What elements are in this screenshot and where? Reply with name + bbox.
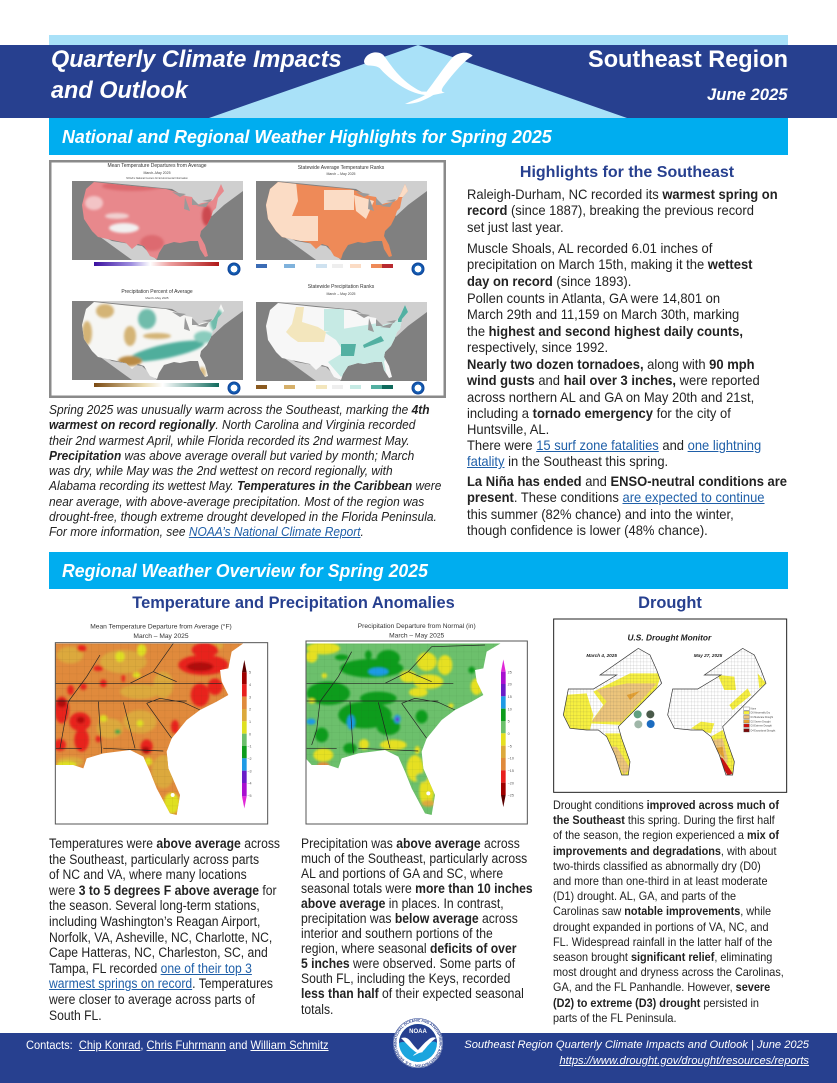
national summary text: Spring 2025 was unusually warm across the Southeast, marking the 4th xyxy=(49,403,430,417)
title xyxy=(51,46,342,104)
highlights text block: day on record (since 1893). xyxy=(467,274,631,289)
map: temperature departures: March–May 2025 xyxy=(143,171,171,175)
precipitation text: 5 inches were observed. Some parts of xyxy=(301,956,515,971)
temperature text: the season. Several long-term stations, xyxy=(49,898,260,913)
highlights text block: respectively, since 1992. xyxy=(467,340,608,355)
legend: precipitation scale: −10 xyxy=(508,757,514,761)
legend: temperature scale: 3 xyxy=(249,695,251,699)
report citation xyxy=(464,1039,809,1066)
temperature text: Cape Hatteras, NC, Charleston, SC, and xyxy=(49,945,268,960)
legend: temperature scale: −1 xyxy=(247,745,252,749)
legend: precipitation scale: 10 xyxy=(508,707,512,711)
map: drought monitor xyxy=(553,618,788,793)
drought text: improvements and degradations, with about xyxy=(553,845,777,858)
legend: temperature scale: −4 xyxy=(247,782,252,786)
report citation: Southeast Region Quarterly Climate Impacts and Outlook | June 2025 xyxy=(464,1039,809,1051)
legend: drought categories: D2 Severe Drought xyxy=(751,720,771,723)
national summary text: warmest on record regionally. North Carolina and Virginia recorded xyxy=(49,418,415,432)
temperature text: warmest springs on record. Temperatures xyxy=(49,976,273,991)
temperature text: of NC and VA, where many locations xyxy=(49,867,247,882)
legend: drought categories xyxy=(744,707,776,732)
legend: drought categories: D4 Exceptional Drought xyxy=(751,729,776,732)
section bar: regional overview xyxy=(49,552,788,589)
drought text: of the season, the region experienced a mix of xyxy=(553,829,779,842)
region heading: Southeast Region xyxy=(588,46,788,73)
drought text: GA, and the FL Panhandle. However, severe xyxy=(553,981,770,994)
national summary text xyxy=(48,403,441,539)
temperature text: Norfolk, VA, Asheville, NC, Charlotte, NC, xyxy=(49,930,272,945)
title: and Outlook xyxy=(51,77,188,104)
map: temperature departure: Mean Temperature Departure from Average (°F) xyxy=(90,623,232,631)
drought text xyxy=(553,799,784,1025)
drought text: and more than one-third in at least moderate xyxy=(553,875,767,888)
map: precipitation percent: March–May 2025 xyxy=(145,296,169,300)
highlights text block: fatality in the Southeast this spring. xyxy=(467,454,668,469)
drought text: (D1) drought. AL, GA, and parts of the xyxy=(553,890,736,903)
map: temperature ranks: March – May 2025 xyxy=(326,172,356,176)
drought text: (D2) to extreme (D3) drought persisted in xyxy=(553,997,759,1010)
precipitation text: much of the Southeast, particularly across xyxy=(301,851,527,866)
map: temperature departures: NOAA's National Centers for Environmental Information xyxy=(126,177,188,180)
national summary text: was dry, while May was the 2nd wettest on record regionally, with xyxy=(49,464,393,478)
highlights text block: Huntsville, AL. xyxy=(467,422,549,437)
panel: national maps xyxy=(49,160,446,398)
highlights text block xyxy=(467,187,787,538)
legend: drought categories: D3 Extreme Drought xyxy=(751,725,772,728)
national summary text: Alabama recording its wettest May. Temperatures in the Caribbean were xyxy=(49,479,441,493)
map: precipitation departure xyxy=(306,623,528,824)
drought text: season brought significant relief, eliminating xyxy=(553,951,772,964)
precipitation text: above average in places. In contrast, xyxy=(301,896,504,911)
map: precipitation ranks: Statewide Precipitation Ranks xyxy=(308,284,375,290)
highlights text block: the highest and second highest daily counts, xyxy=(467,324,743,339)
temperature text xyxy=(49,836,280,1023)
drought text: Drought conditions improved across much of xyxy=(553,799,779,812)
legend: precipitation scale: −25 xyxy=(508,794,514,798)
map: march 4 xyxy=(564,650,661,775)
section bar: regional overview: Regional Weather Overview for Spring 2025 xyxy=(62,560,428,581)
highlights text block: precipitation on March 15th, making it the wettest xyxy=(467,257,752,272)
map: precipitation ranks xyxy=(256,284,427,394)
highlights text block: present. These conditions are expected to continue xyxy=(467,490,765,505)
temperature text: Temperatures were above average across xyxy=(49,836,280,851)
legend: precipitation scale: 0 xyxy=(508,732,510,736)
map: temperature departures: Mean Temperature Departures from Average xyxy=(107,163,207,169)
heading: drought: Drought xyxy=(638,594,702,612)
map: drought monitor: U.S. Drought Monitor xyxy=(627,632,712,642)
legend: precipitation scale xyxy=(501,659,514,807)
legend: temperature scale: 0 xyxy=(249,732,251,736)
icon: noaa seal: NOAA xyxy=(409,1029,427,1035)
report citation: https://www.drought.gov/drought/resources/reports xyxy=(559,1054,809,1066)
legend: drought categories: None xyxy=(751,709,757,711)
national summary text: their 2nd warmest April, while Florida recorded its 2nd warmest May. xyxy=(49,434,410,448)
precipitation text: precipitation was below average across xyxy=(301,911,518,926)
highlights text block: There were 15 surf zone fatalities and one lightning xyxy=(467,438,761,453)
legend: temperature scale: −2 xyxy=(247,757,252,761)
map: temperature departure xyxy=(54,623,268,824)
highlights text block: this summer (82% chance) and into the winter, xyxy=(467,507,734,522)
highlights text block: March 29th and 11,159 on March 30th, marking xyxy=(467,307,739,322)
drought text: drought expanded in portions of VA, NC, and xyxy=(553,921,769,934)
national summary text: near average, with above-average precipitation. Most of the region was xyxy=(49,494,424,508)
heading: highlights for the southeast: Highlights for the Southeast xyxy=(520,164,734,181)
highlights text block: Muscle Shoals, AL recorded 6.01 inches of xyxy=(467,241,712,256)
section bar: national highlights xyxy=(49,118,788,155)
map: precipitation percent xyxy=(72,289,243,394)
highlights text block: set just last year. xyxy=(467,220,564,235)
map: temperature departures xyxy=(72,163,243,276)
map: may 27 xyxy=(667,648,766,776)
drought text: parts of the FL Peninsula. xyxy=(553,1012,676,1025)
temperature text: Tampa, FL recorded one of their top 3 xyxy=(49,961,252,976)
section bar: national highlights: National and Regional Weather Highlights for Spring 2025 xyxy=(62,126,552,147)
map: precipitation departure: March – May 2025 xyxy=(389,632,445,639)
legend: temperature scale: 5 xyxy=(249,671,251,675)
highlights text block: though confidence is lower (48% chance). xyxy=(467,523,708,538)
highlights text block: wind gusts and hail over 3 inches, were reported xyxy=(467,373,760,388)
national summary text: For more information, see NOAA’s National Climate Report. xyxy=(49,525,364,539)
legend: precipitation scale: −20 xyxy=(508,781,514,785)
highlights text block: Pollen counts in Atlanta, GA were 14,801 on xyxy=(467,291,720,306)
drought text: the Southeast this spring. During the first half xyxy=(553,814,775,827)
temperature text: the Southeast, particularly across parts xyxy=(49,852,259,867)
map: temperature ranks xyxy=(256,165,427,276)
drought text: most drought and dryness across the Carolinas, xyxy=(553,966,784,979)
map: drought monitor: May 27, 2025 xyxy=(694,653,723,658)
heading: anomalies: Temperature and Precipitation Anomalies xyxy=(132,594,455,612)
highlights text block: record (since 1887), breaking the previous record xyxy=(467,203,754,218)
legend: drought categories: D0 Abnormally Dry xyxy=(751,712,771,715)
precipitation text: less than half of their expected seasonal xyxy=(301,986,524,1001)
precipitation text: AL and portions of GA and SC, where xyxy=(301,866,503,881)
legend: precipitation scale: −15 xyxy=(508,769,514,773)
highlights text block: Nearly two dozen tornadoes, along with 90 mph xyxy=(467,357,755,372)
temperature text: including Washington’s Reagan Airport, xyxy=(49,914,260,929)
drought text: FL. Widespread rainfall in the latter half of the xyxy=(553,936,772,949)
map: temperature ranks: Statewide Average Temperature Ranks xyxy=(298,165,385,171)
legend: temperature scale: −3 xyxy=(247,769,252,773)
highlights text block: Raleigh-Durham, NC recorded its warmest spring on xyxy=(467,187,778,202)
map: drought monitor: March 4, 2025 xyxy=(586,653,617,658)
precipitation text: seasonal totals were more than 10 inches xyxy=(301,881,533,896)
legend: precipitation scale: 25 xyxy=(508,670,512,674)
header banner xyxy=(0,35,837,118)
map: precipitation departure: Precipitation Departure from Normal (in) xyxy=(358,623,476,630)
agency logos xyxy=(634,710,655,728)
drought text: two-thirds classified as abnormally dry (D0) xyxy=(553,860,761,873)
national summary text: drought-free, though extreme drought developed in the Florida Peninsula. xyxy=(49,510,437,524)
national summary text: Precipitation was above average overall but varied by month; March xyxy=(49,449,414,463)
map: temperature departure: March – May 2025 xyxy=(133,633,189,640)
precipitation text: South FL, including the Keys, recorded xyxy=(301,971,510,986)
legend: precipitation scale: 15 xyxy=(508,695,512,699)
legend: temperature scale: 4 xyxy=(249,683,251,687)
precipitation text xyxy=(301,836,533,1017)
map: precipitation ranks: March – May 2025 xyxy=(326,292,356,296)
map: precipitation percent: Precipitation Percent of Average xyxy=(121,289,193,295)
highlights text block: La Niña has ended and ENSO-neutral conditions are xyxy=(467,474,787,489)
legend: temperature scale xyxy=(242,660,252,808)
legend: precipitation scale: −5 xyxy=(508,744,512,748)
precipitation text: region, where seasonal deficits of over xyxy=(301,941,516,956)
legend: temperature scale: −5 xyxy=(247,794,252,798)
precipitation text: totals. xyxy=(301,1002,333,1017)
drought text: Carolinas saw notable improvements, while xyxy=(553,905,771,918)
legend: drought categories: D1 Moderate Drought xyxy=(751,716,773,719)
title: Quarterly Climate Impacts xyxy=(51,46,342,73)
legend: precipitation scale: 20 xyxy=(508,683,512,687)
precipitation text: interior and southern portions of the xyxy=(301,926,493,941)
contacts: Contacts: Chip Konrad, Chris Fuhrmann and William Schmitz xyxy=(26,1038,329,1052)
temperature text: were 3 to 5 degrees F above average for xyxy=(49,883,277,898)
legend: temperature scale: 1 xyxy=(249,720,251,724)
highlights text block: across northern AL and GA on May 20th and 21st, xyxy=(467,390,754,405)
temperature text: South FL. xyxy=(49,1008,102,1023)
date: June 2025 xyxy=(707,85,788,104)
temperature text: were closer to average across parts of xyxy=(49,992,255,1007)
precipitation text: Precipitation was above average across xyxy=(301,836,520,851)
highlights text block: including a tornado emergency for the city of xyxy=(467,406,731,421)
footer xyxy=(0,1033,837,1083)
legend: precipitation scale: 5 xyxy=(508,720,510,724)
legend: temperature scale: 2 xyxy=(249,708,251,712)
